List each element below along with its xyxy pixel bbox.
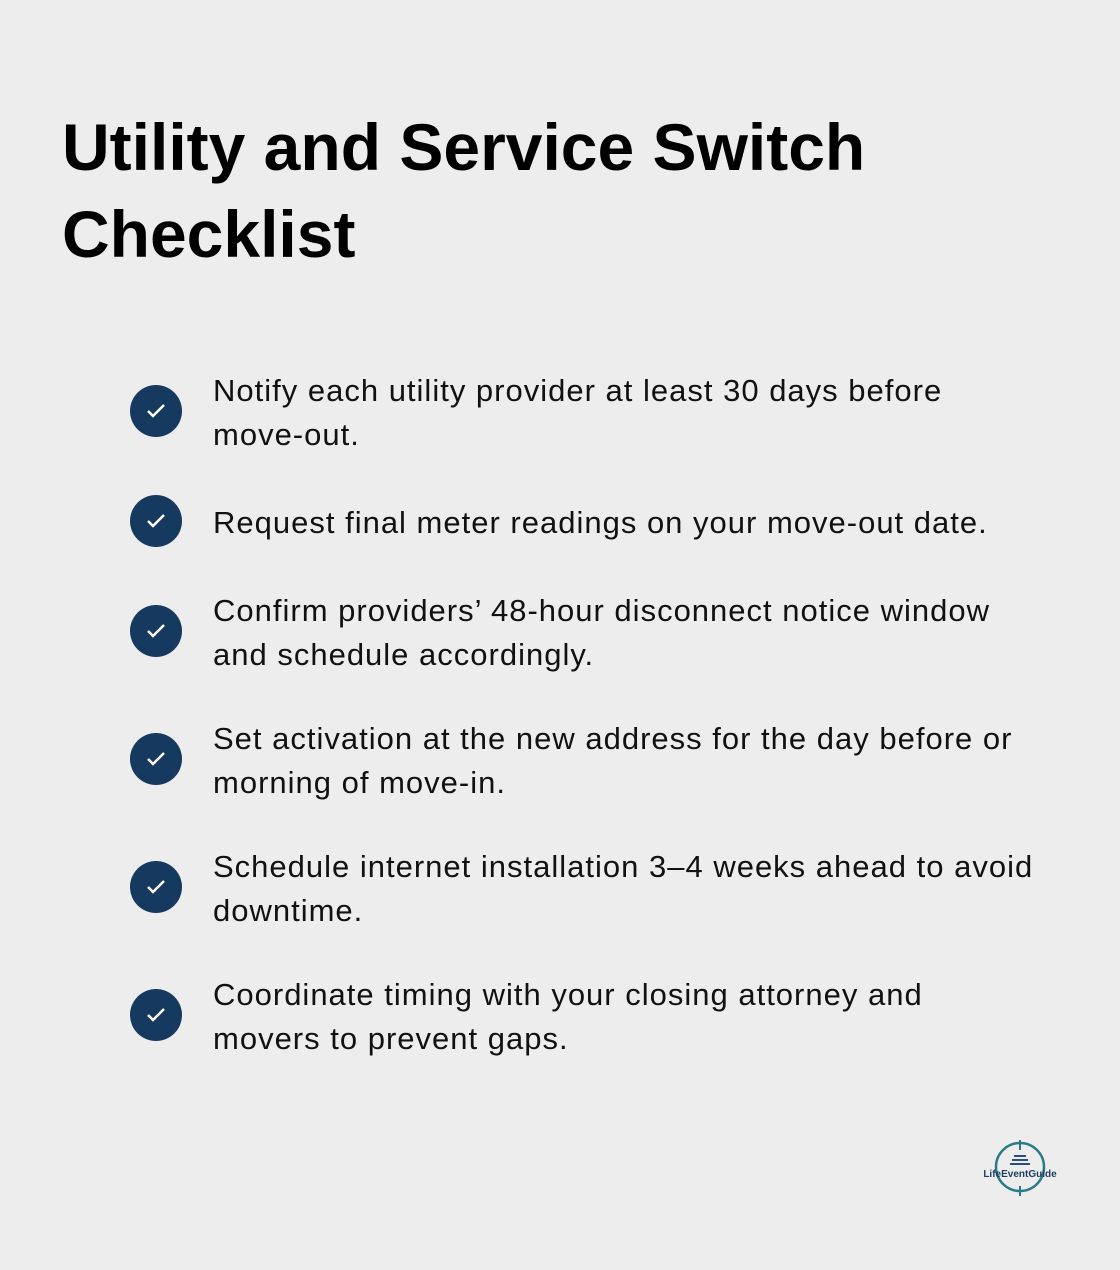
logo: LifeEventGuide: [983, 1169, 1057, 1180]
item 1: [130, 373, 942, 452]
item 1: move-out.: [213, 417, 360, 452]
item 6: [130, 977, 923, 1056]
icon: check: [130, 989, 182, 1041]
item 3: and schedule accordingly.: [213, 637, 594, 672]
item 3: Confirm providers’ 48-hour disconnect notice window: [213, 593, 990, 628]
icon: check: [130, 861, 182, 913]
item 6: Coordinate timing with your closing attorney and: [213, 977, 923, 1012]
title: Utility and Service Switch: [62, 110, 865, 184]
item 4: morning of move-in.: [213, 765, 506, 800]
item 5: downtime.: [213, 893, 363, 928]
logo: [983, 1140, 1057, 1196]
item 6: movers to prevent gaps.: [213, 1021, 569, 1056]
item 5: Schedule internet installation 3–4 weeks ahead to avoid: [213, 849, 1033, 884]
item 5: [130, 849, 1033, 928]
icon: check: [130, 733, 182, 785]
title: [62, 110, 865, 271]
icon: check: [130, 605, 182, 657]
item 2: Request final meter readings on your move-out date.: [213, 505, 988, 540]
item 2: [130, 495, 988, 547]
item 1: Notify each utility provider at least 30 days before: [213, 373, 942, 408]
icon: check: [130, 495, 182, 547]
item 4: Set activation at the new address for the day before or: [213, 721, 1012, 756]
item 4: [130, 721, 1012, 800]
icon: check: [130, 385, 182, 437]
title: Checklist: [62, 197, 355, 271]
item 3: [130, 593, 990, 672]
